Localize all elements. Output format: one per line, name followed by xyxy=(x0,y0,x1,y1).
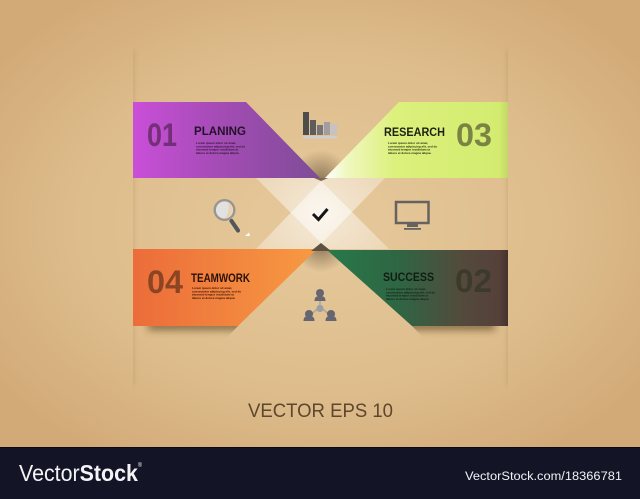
centre fold tips xyxy=(311,178,331,251)
body text: success: eiusmod tempor incididunt ut xyxy=(386,294,428,298)
footer bar xyxy=(0,447,640,499)
body text: research: labore et dolore magna aliqua. xyxy=(388,151,432,155)
body text: teamwork: labore et dolore magna aliqua. xyxy=(192,296,236,300)
number 01: 01 xyxy=(147,117,177,153)
logo: ® xyxy=(138,462,143,469)
caption: VECTOR EPS 10 xyxy=(248,401,393,422)
heading: research: RESEARCH xyxy=(384,127,445,139)
body text: teamwork: consectetur adipiscing elit, sed do xyxy=(192,289,241,293)
body text: success xyxy=(386,287,435,301)
number 02: 02 xyxy=(455,263,492,299)
body text: teamwork: eiusmod tempor incididunt ut xyxy=(192,293,234,297)
body text: planing xyxy=(196,141,245,155)
body text: research: eiusmod tempor incididunt ut xyxy=(388,148,430,152)
folded shadows xyxy=(144,153,500,336)
icon: check mark xyxy=(313,209,328,220)
body text: planing: consectetur adipiscing elit, sed do xyxy=(196,144,245,148)
icon: people network xyxy=(304,289,336,321)
heading: success: SUCCESS xyxy=(383,272,434,284)
centre X bands xyxy=(256,178,389,249)
icon: bar chart xyxy=(303,112,337,138)
image id: VectorStock.com/18366781 xyxy=(465,471,622,483)
panel: 01 planing xyxy=(133,102,320,178)
body text: success: consectetur adipiscing elit, sed do xyxy=(386,290,435,294)
body text: teamwork: Lorem ipsum dolor sit amet, xyxy=(192,286,232,290)
body text: planing: eiusmod tempor incididunt ut xyxy=(196,148,238,152)
heading: planing: PLANING xyxy=(194,126,246,138)
body text: teamwork xyxy=(192,286,241,300)
body text: research: Lorem ipsum dolor sit amet, xyxy=(388,141,428,145)
body text: research: consectetur adipiscing elit, sed do xyxy=(388,144,437,148)
panel: 02 success xyxy=(327,250,508,326)
body text: planing: labore et dolore magna aliqua. xyxy=(196,151,240,155)
number 04: 04 xyxy=(147,264,183,300)
icon: magnifier xyxy=(215,200,250,236)
body text: research xyxy=(388,141,437,155)
number 03: 03 xyxy=(456,117,492,153)
body text: planing: Lorem ipsum dolor sit amet, xyxy=(196,141,236,145)
logo: VectorStock xyxy=(19,460,142,486)
body text: success: labore et dolore magna aliqua. xyxy=(386,297,430,301)
panel: 03 research xyxy=(325,102,508,178)
body text: success: Lorem ipsum dolor sit amet, xyxy=(386,287,426,291)
icon: monitor xyxy=(396,202,428,230)
panel: 04 teamwork xyxy=(133,249,317,326)
heading: teamwork: TEAMWORK xyxy=(191,273,251,285)
